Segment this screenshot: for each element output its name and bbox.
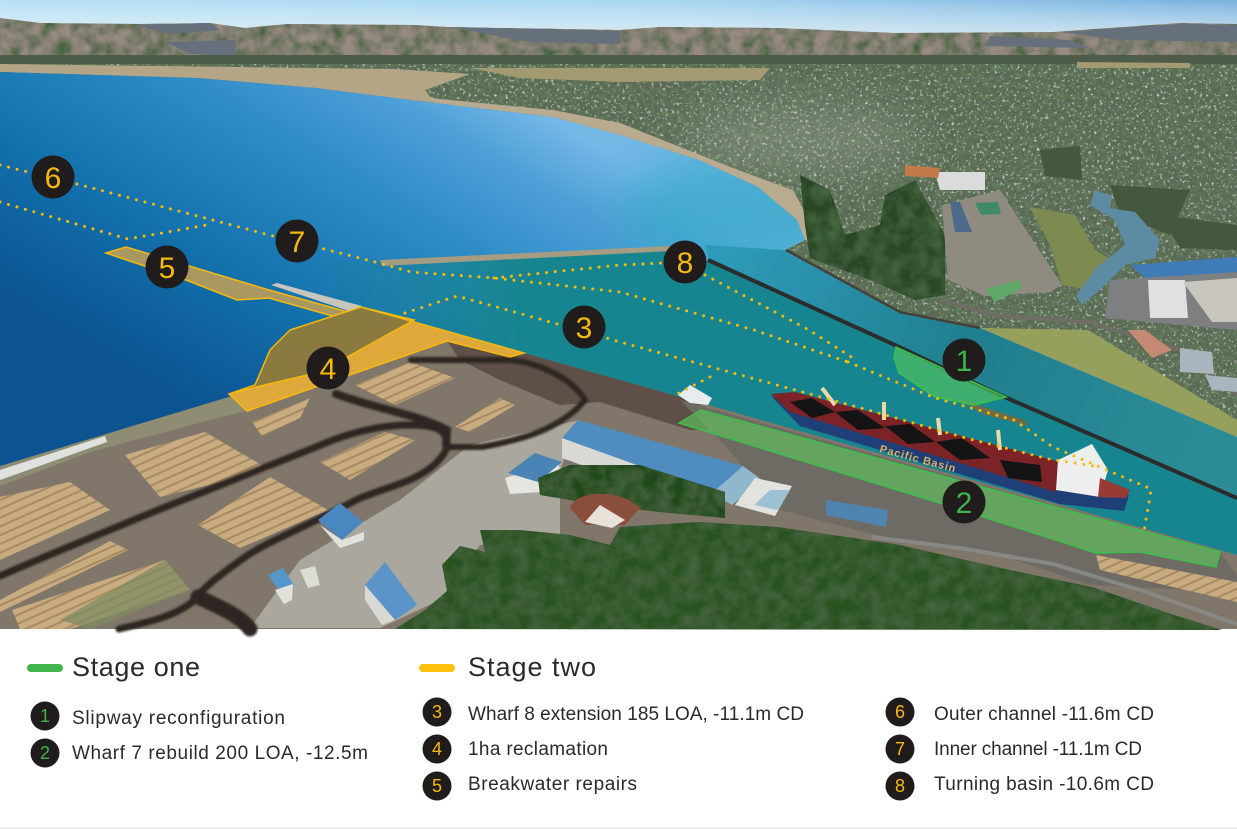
stage two swatch — [419, 664, 455, 672]
marker 1 — [942, 338, 986, 382]
superstructure — [1056, 444, 1108, 497]
buildings at right — [1128, 330, 1237, 392]
legend: channels — [886, 698, 1154, 800]
dotted dredge lines — [0, 165, 1151, 531]
bulk carrier ship — [771, 388, 1130, 511]
marker 3: 3 — [576, 312, 592, 345]
river — [1076, 190, 1160, 305]
sea — [0, 72, 1237, 629]
concrete yard — [250, 420, 580, 628]
marker 5 — [146, 246, 188, 288]
shallows glow — [610, 148, 805, 261]
hull — [771, 396, 1129, 511]
marker 6: 6 — [45, 162, 61, 195]
marker 2: 2 — [956, 487, 972, 520]
stage one slipway zone — [894, 347, 1006, 405]
rock armour on the seawall — [0, 396, 248, 486]
item 2 label: Wharf 7 rebuild 200 LOA, -12.5m — [72, 743, 368, 764]
marker 4 — [306, 346, 350, 390]
item 5 badge: 5 — [432, 776, 442, 796]
item 3 label: Wharf 8 extension 185 LOA, -11.1m CD — [468, 704, 804, 725]
beach — [430, 98, 813, 240]
marker 3 — [562, 306, 606, 348]
item 4 badge — [422, 734, 452, 764]
marker 7 — [276, 220, 318, 262]
slipway spit — [955, 398, 1028, 426]
sky — [0, 0, 1237, 36]
item 5 badge — [422, 772, 452, 800]
dark haul roads — [0, 360, 585, 629]
stage two breakwater zone — [106, 247, 348, 317]
item 1 label: Slipway reconfiguration — [72, 708, 285, 729]
item 6 badge: 6 — [895, 702, 905, 722]
trees behind the shed — [538, 465, 725, 518]
old breakwater stub — [271, 283, 362, 312]
item 3 badge — [422, 698, 452, 726]
dark mountain shadows — [135, 23, 1237, 56]
rail yard — [942, 190, 1062, 296]
inner harbour water — [300, 250, 1237, 570]
paddock fields — [470, 62, 1190, 82]
shed roofs in yard — [905, 165, 1022, 302]
foreshore grass — [980, 328, 1237, 437]
channel water — [705, 245, 1237, 500]
item 7 badge: 7 — [895, 739, 905, 759]
item 8 badge — [886, 772, 914, 800]
distant mountains — [0, 18, 1237, 56]
port land — [0, 341, 1237, 629]
main breakwater arm — [380, 246, 672, 266]
bottom rule — [0, 827, 1237, 829]
marker 1: 1 — [956, 345, 972, 378]
pine and park trees by the beach — [800, 175, 945, 300]
legend: stage one — [27, 652, 368, 768]
item 5 label: Breakwater repairs — [468, 774, 637, 795]
marker 6 — [32, 156, 74, 198]
item 6 badge — [886, 698, 914, 726]
legend: stage two — [419, 652, 804, 800]
marker 7: 7 — [289, 226, 305, 259]
item 7 badge — [886, 734, 914, 764]
item 1 badge — [30, 702, 60, 730]
factory complex — [1105, 257, 1237, 330]
coastal road — [872, 537, 1237, 624]
item 7 label: Inner channel -11.1m CD — [934, 739, 1142, 760]
grass around river — [1030, 207, 1120, 290]
item 8 badge: 8 — [895, 776, 905, 796]
log stacks — [0, 362, 1237, 629]
marker 8: 8 — [677, 247, 693, 280]
cargo holds — [790, 398, 1042, 482]
marker 8 — [664, 240, 706, 284]
white sea wall — [0, 436, 107, 480]
blue warehouse by wharf — [826, 500, 888, 527]
item 3 badge: 3 — [432, 702, 442, 722]
aerial photograph of the port — [0, 0, 1237, 630]
far plain band — [0, 55, 1237, 64]
marker 2 — [942, 480, 986, 524]
stage two heading: Stage two — [468, 652, 596, 682]
circular feature — [570, 494, 640, 528]
stage two reclamation zone — [229, 307, 524, 411]
shoreline dark wall — [786, 250, 980, 328]
tree belts in town — [1040, 146, 1237, 250]
marker 4: 4 — [320, 353, 336, 386]
item 1 badge: 1 — [40, 706, 50, 726]
plain and town base — [0, 50, 1237, 450]
item 2 badge — [30, 738, 60, 768]
tug boat — [678, 385, 712, 405]
pale built-up centre — [680, 106, 920, 174]
cranes — [822, 388, 1000, 450]
item 2 badge: 2 — [40, 743, 50, 763]
ship name: Pacific Basin — [878, 443, 957, 475]
stern deck — [1098, 478, 1130, 498]
item 4 badge: 4 — [432, 739, 442, 759]
wharf apron — [680, 400, 1237, 592]
item 6 label: Outer channel -11.6m CD — [934, 704, 1154, 725]
stage one heading: Stage one — [72, 652, 200, 682]
forest — [395, 522, 1222, 630]
far shoreline land — [0, 64, 470, 103]
item 8 label: Turning basin -10.6m CD — [934, 774, 1154, 795]
deck — [771, 392, 1060, 492]
stage one wharf zone — [679, 410, 1220, 567]
rock training wall — [708, 260, 1237, 498]
small blue building — [505, 453, 562, 494]
small yard buildings — [268, 503, 417, 625]
road along foreshore — [940, 300, 1237, 395]
big blue shed — [562, 420, 792, 516]
item 4 label: 1ha reclamation — [468, 739, 608, 760]
stage one swatch — [27, 664, 63, 672]
green tinted logs — [60, 560, 190, 629]
dark quay top — [447, 341, 760, 430]
marker 5: 5 — [159, 252, 175, 285]
